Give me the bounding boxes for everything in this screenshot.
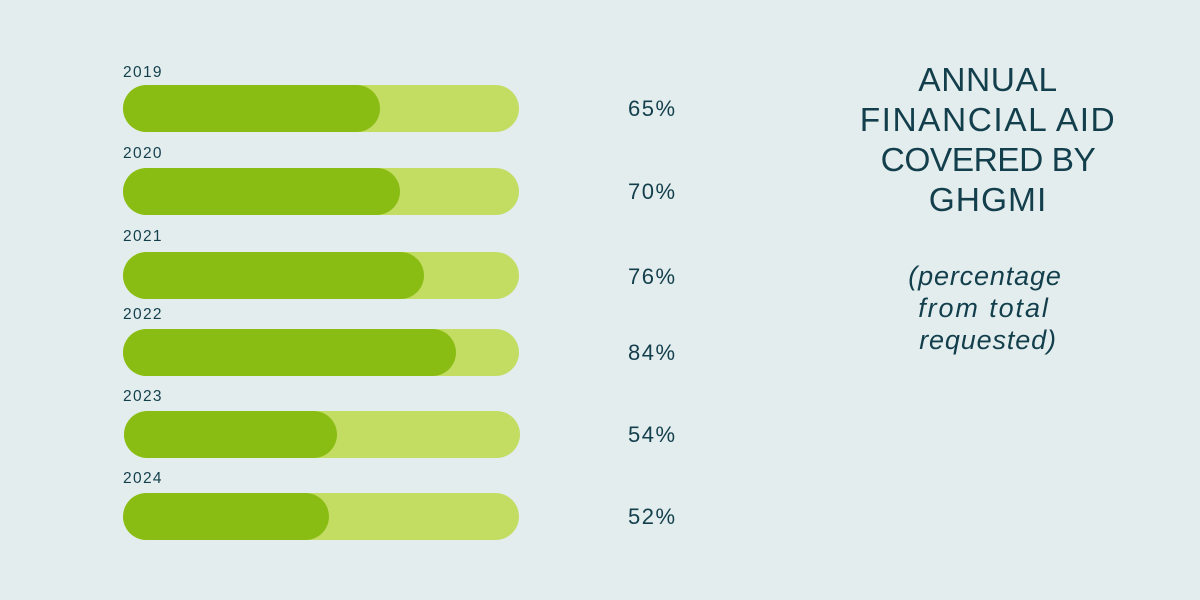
row 2019: 65% <box>628 96 677 121</box>
title: COVERED BY <box>881 142 1095 179</box>
title <box>860 62 1116 219</box>
subtitle <box>908 261 1062 355</box>
row 2019: 2019 <box>123 64 163 81</box>
row 2023: 2023 <box>123 388 163 405</box>
row 2021: 2021 <box>123 228 163 245</box>
row 2023: 54% <box>628 422 677 447</box>
row 2024: 2024 <box>123 470 163 487</box>
row 2019 <box>123 64 677 132</box>
row 2021: 76% <box>628 264 677 289</box>
subtitle: from total <box>918 293 1050 323</box>
subtitle: requested) <box>919 325 1057 355</box>
subtitle: (percentage <box>908 261 1062 291</box>
row 2022: 2022 <box>123 306 163 323</box>
row 2023 <box>123 388 677 458</box>
row 2024: 52% <box>628 504 677 529</box>
row 2022: 84% <box>628 340 677 365</box>
row 2020 <box>123 145 677 215</box>
row 2020: 2020 <box>123 145 163 162</box>
row 2021 <box>123 228 677 299</box>
row 2020: 70% <box>628 179 677 204</box>
title: GHGMI <box>929 182 1047 219</box>
title: ANNUAL <box>918 62 1058 99</box>
row 2022 <box>123 306 677 376</box>
row 2024 <box>123 470 677 540</box>
bar chart <box>123 64 677 540</box>
title: FINANCIAL AID <box>860 102 1116 139</box>
